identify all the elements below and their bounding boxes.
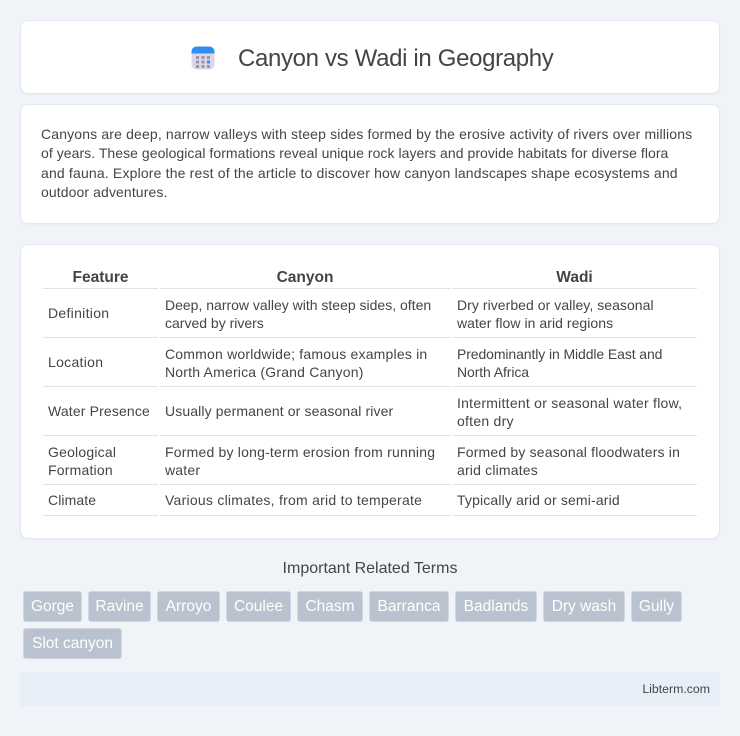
tag bbox=[157, 591, 220, 622]
tag: Coulee bbox=[234, 598, 283, 615]
tag bbox=[23, 591, 82, 622]
intro paragraph: Canyons are deep, narrow valleys with steep sides formed by the erosive activity of rivers over millions bbox=[41, 126, 692, 142]
tag bbox=[88, 591, 151, 622]
tag bbox=[297, 591, 363, 622]
tag bbox=[226, 591, 291, 622]
tag: Dry wash bbox=[552, 598, 616, 615]
tag bbox=[455, 591, 537, 622]
header panel bbox=[20, 20, 720, 94]
row: geological formation: water bbox=[165, 462, 200, 478]
row: location: Common worldwide; famous examples in bbox=[165, 346, 427, 362]
related terms heading: Important Related Terms bbox=[283, 560, 457, 577]
tag: Barranca bbox=[378, 598, 440, 615]
row: water presence: Usually permanent or seasonal river bbox=[165, 403, 393, 419]
row: definition: Deep, narrow valley with steep sides, often bbox=[165, 297, 431, 313]
row: location: Predominantly in Middle East and bbox=[457, 346, 662, 362]
row: climate: Typically arid or semi-arid bbox=[457, 492, 620, 508]
footer credit: Libterm.com bbox=[642, 682, 710, 696]
tag bbox=[631, 591, 682, 622]
row: climate: Climate bbox=[48, 492, 96, 508]
intro paragraph: and fauna. Explore the rest of the article to discover how canyon landscapes shape ecosystems and bbox=[41, 165, 678, 181]
intro paragraph: of years. These geological formations reveal unique rock layers and provide habitats for diverse flora bbox=[41, 145, 668, 161]
tag: Arroyo bbox=[166, 598, 211, 615]
row: water presence bbox=[48, 395, 682, 429]
tag bbox=[369, 591, 449, 622]
row: water presence: Water Presence bbox=[48, 403, 150, 419]
row: geological formation: arid climates bbox=[457, 462, 538, 478]
tag: Gully bbox=[639, 598, 674, 615]
row: definition bbox=[48, 297, 654, 331]
tag bbox=[23, 628, 122, 659]
row: location: North Africa bbox=[457, 364, 529, 380]
comparison table bbox=[43, 269, 697, 516]
comparison table panel bbox=[20, 244, 720, 539]
row: geological formation: Formed by seasonal floodwaters in bbox=[457, 444, 680, 460]
column headings bbox=[72, 269, 593, 286]
intro paragraph bbox=[41, 126, 692, 200]
column headings: Canyon bbox=[277, 269, 333, 286]
row: geological formation: Formation bbox=[48, 462, 113, 478]
row: location bbox=[48, 346, 662, 380]
tag: Ravine bbox=[95, 598, 144, 615]
row: geological formation bbox=[48, 444, 680, 478]
title: Canyon vs Wadi in Geography bbox=[238, 45, 553, 72]
tag: Slot canyon bbox=[32, 635, 113, 652]
footer bar bbox=[20, 672, 720, 706]
row: definition: water flow in arid regions bbox=[457, 315, 613, 331]
row: climate bbox=[48, 492, 620, 508]
column headings: Wadi bbox=[556, 269, 593, 286]
tag: Gorge bbox=[31, 598, 74, 615]
row: climate: Various climates, from arid to temperate bbox=[165, 492, 422, 508]
column headings: Feature bbox=[72, 269, 128, 286]
row: definition: Definition bbox=[48, 305, 109, 321]
row: water presence: Intermittent or seasonal water flow, bbox=[457, 395, 682, 411]
row: location: North America (Grand Canyon) bbox=[165, 364, 364, 380]
intro text panel bbox=[20, 104, 720, 224]
icon: calendar bbox=[192, 46, 214, 70]
row: location: Location bbox=[48, 354, 103, 370]
row: geological formation: Geological bbox=[48, 444, 116, 460]
row: definition: carved by rivers bbox=[165, 315, 264, 331]
tag: Badlands bbox=[464, 598, 528, 615]
row: definition: Dry riverbed or valley, seasonal bbox=[457, 297, 654, 313]
tag: Chasm bbox=[305, 598, 355, 615]
intro paragraph: outdoor adventures. bbox=[41, 184, 167, 200]
row: geological formation: Formed by long-term erosion from running bbox=[165, 444, 435, 460]
tag bbox=[543, 591, 625, 622]
related terms tags bbox=[23, 591, 682, 659]
row: water presence: often dry bbox=[457, 413, 514, 429]
